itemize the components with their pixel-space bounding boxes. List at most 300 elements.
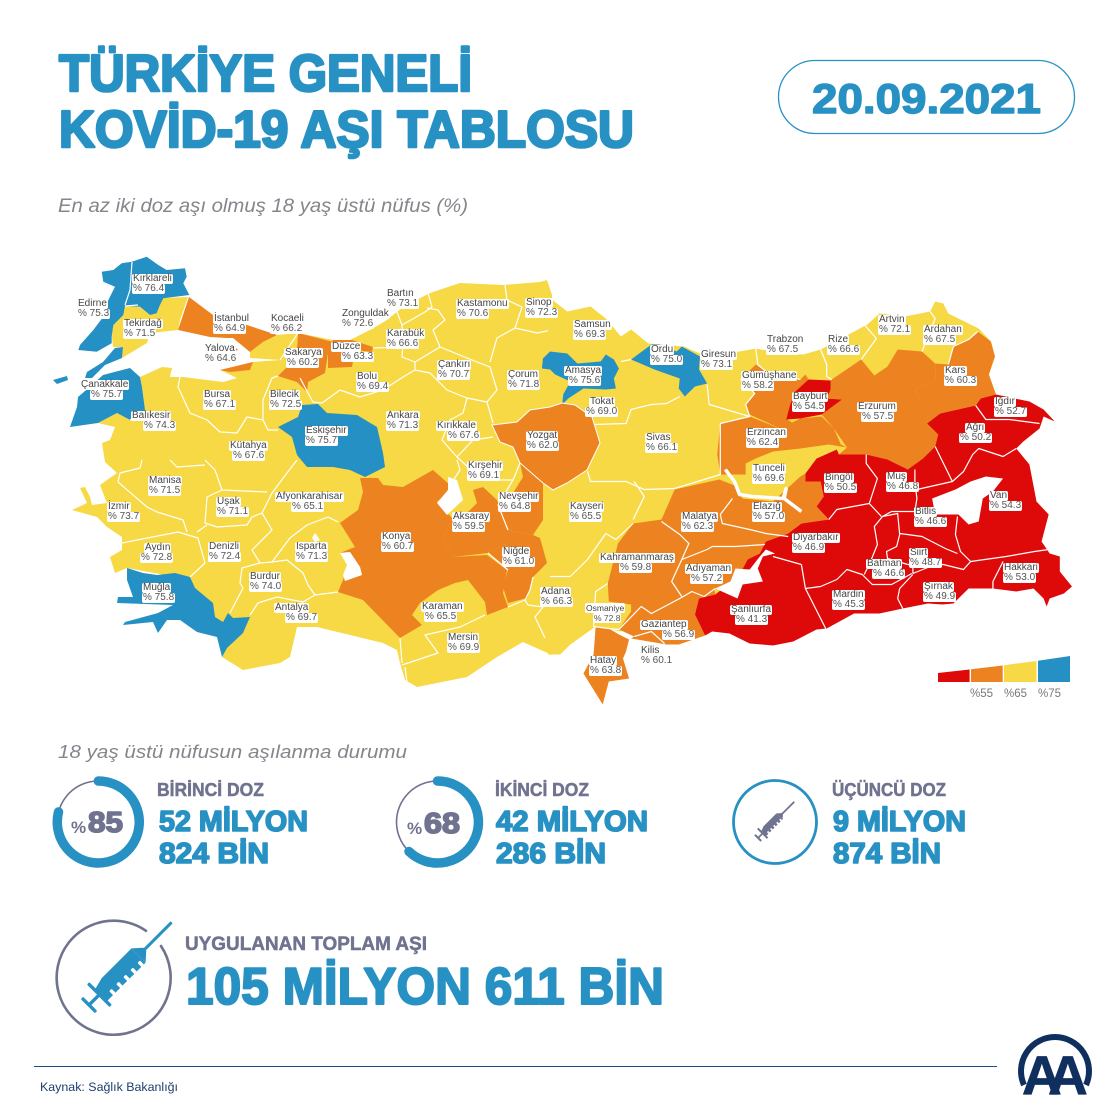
legend: %55 [970, 688, 993, 700]
source: Kaynak: Sağlık Bakanlığı [40, 1080, 178, 1094]
label: Niğde: Niğde [503, 546, 529, 557]
label: Bartın [387, 288, 419, 309]
label: Kırklareli [132, 273, 173, 294]
label: Van: Van [990, 490, 1007, 501]
label: Bolu: % 69.4 [357, 381, 388, 392]
Gökçeada [53, 376, 68, 384]
label: Yalova [205, 343, 236, 364]
label: Malatya [681, 512, 718, 532]
label: Tunceli: % 69.6 [753, 473, 784, 484]
label: Diyarbakır: Diyarbakır [793, 532, 839, 543]
label: Bingöl: % 50.5 [825, 482, 856, 493]
second dose text: 286 BİN [496, 838, 606, 870]
label: Sivas [645, 433, 678, 453]
label: Çankırı: % 70.7 [438, 369, 469, 380]
label: Tekirdağ: % 71.5 [124, 328, 155, 339]
label: Konya [381, 531, 414, 552]
label: Ağrı: Ağrı [966, 422, 984, 433]
label: Ardahan: Ardahan [924, 324, 962, 335]
label: Zonguldak [342, 308, 390, 329]
label: Tokat [585, 397, 618, 417]
label: Iğdır: % 52.7 [995, 406, 1026, 417]
label: Ankara [386, 410, 420, 431]
label: Gaziantep: Gaziantep [641, 619, 687, 630]
label: İzmir: İzmir [108, 501, 130, 512]
label: Tunceli [752, 464, 786, 484]
Beyşehir lake [340, 552, 362, 581]
label: Kayseri: Kayseri [570, 501, 603, 512]
label: Balıkesir: Balıkesir [132, 410, 170, 421]
label: Antalya: % 69.7 [286, 612, 317, 623]
Atatürk dam lake [715, 550, 775, 598]
label: İstanbul [213, 312, 249, 334]
label: Sinop: % 72.3 [526, 307, 557, 318]
label: Afyonkarahisar [275, 491, 344, 512]
Gümüşhane [741, 364, 808, 428]
label: İstanbul: İstanbul [214, 313, 249, 324]
label: Osmaniye: Osmaniye [586, 603, 624, 613]
label: Karaman: % 65.5 [425, 611, 456, 622]
label: Kahramanmaraş: % 59.8 [620, 562, 651, 573]
label: Iğdır [994, 397, 1027, 417]
label: Erzincan: % 62.4 [747, 437, 778, 448]
label: Diyarbakır: % 46.9 [793, 542, 824, 553]
label: Balıkesir: % 74.3 [144, 420, 175, 431]
label: Muş: % 46.8 [887, 481, 918, 492]
Niğde [488, 530, 547, 603]
label: Balıkesir [131, 410, 176, 431]
total vaccine text: UYGULANAN TOPLAM AŞI [185, 933, 427, 955]
third dose ring with syringe [734, 780, 816, 864]
label: Zonguldak: % 72.6 [342, 318, 373, 329]
first dose text: BİRİNCİ DOZ [157, 780, 264, 800]
label: Samsun [573, 320, 612, 340]
label: Muğla [142, 583, 175, 603]
label: Erzurum: % 57.5 [862, 411, 893, 422]
label: Kırıkkale: % 67.6 [448, 430, 479, 441]
label: Bartın: Bartın [387, 288, 414, 299]
Ordu [631, 344, 707, 396]
label: Şanlıurfa: Şanlıurfa [731, 604, 771, 615]
third dose text: 9 MİLYON [833, 806, 966, 838]
label: Siirt [909, 548, 942, 568]
label: Samsun: Samsun [574, 319, 611, 330]
date pill [778, 60, 1074, 134]
label: Gümüşhane [741, 371, 797, 391]
label: Hakkari: % 53.0 [1004, 572, 1035, 583]
label: Zonguldak: Zonguldak [342, 308, 389, 319]
third dose text: ÜÇÜNCÜ DOZ [832, 780, 946, 800]
label: Antalya: Antalya [275, 602, 308, 613]
first dose text: 824 BİN [159, 838, 269, 870]
orange south-east group: Malatya, Elazığ, Adıyaman, Kahramanmaraş, Gaziantep, Kilis [608, 474, 829, 644]
total vaccine text [185, 933, 664, 1016]
label: Kayseri: % 65.5 [570, 511, 601, 522]
label: Adıyaman: Adıyaman [686, 563, 731, 574]
Keban dam lake [725, 470, 801, 512]
second dose ring [396, 781, 478, 863]
label: Çankırı: Çankırı [438, 359, 470, 370]
label: Kırıkkale: Kırıkkale [437, 420, 476, 431]
label: Burdur [249, 571, 282, 592]
label: Şanlıurfa [730, 605, 772, 625]
map of Turkey [53, 256, 1072, 704]
label: Tunceli: Tunceli [753, 463, 785, 474]
Amasya [542, 352, 619, 404]
label: Uşak: % 71.1 [217, 506, 248, 517]
label: Ankara: Ankara [387, 410, 419, 421]
label: Van: % 54.3 [990, 500, 1021, 511]
label: Adıyaman: % 57.2 [691, 573, 722, 584]
label: İzmir [107, 500, 140, 522]
label: Isparta: Isparta [296, 541, 327, 552]
title line 1: TÜRKİYE GENELİ [59, 45, 472, 103]
label: Bayburt: % 54.5 [793, 401, 824, 412]
Tuz lake [437, 477, 463, 515]
label: Afyonkarahisar: Afyonkarahisar [276, 491, 343, 502]
label: Erzincan: Erzincan [747, 427, 786, 438]
label: Karaman [421, 602, 464, 622]
label: Kırıkkale [436, 420, 480, 441]
label: Elazığ: Elazığ [753, 501, 781, 512]
label: Ağrı [959, 423, 992, 443]
label: Van [989, 491, 1022, 511]
label: Bursa: % 67.1 [204, 399, 235, 410]
label: Gümüşhane: Gümüşhane [742, 370, 796, 381]
Erzincan [717, 416, 847, 474]
label: Manisa: % 71.5 [149, 485, 180, 496]
label: Kastamonu [456, 298, 509, 319]
label: Erzurum [857, 402, 897, 422]
map subtitle: En az iki doz aşı olmuş 18 yaş üstü nüfus (%) [58, 196, 468, 217]
label: Elazığ [752, 502, 785, 522]
stats subtitle: 18 yaş üstü nüfusun aşılanma durumu [58, 742, 407, 762]
label: Kahramanmaraş: Kahramanmaraş [600, 552, 674, 563]
label: Adana [540, 587, 573, 607]
label: Kocaeli: Kocaeli [271, 313, 304, 324]
label: Muğla: Muğla [143, 582, 170, 593]
label: Karabük [386, 328, 425, 349]
label: Yozgat [526, 430, 559, 451]
label: Eskişehir [305, 425, 348, 446]
label: Gaziantep [640, 620, 695, 640]
label: Düzce [331, 341, 374, 362]
eastern yellow base [548, 296, 996, 654]
label: Bayburt [792, 392, 828, 412]
label: Kütahya [229, 440, 268, 461]
label: Ordu [650, 345, 683, 365]
label: Mersin: Mersin [448, 632, 478, 643]
label: Kars: Kars [945, 365, 966, 376]
label: Çanakkale: Çanakkale [81, 379, 128, 390]
label: Kırşehir: Kırşehir [468, 460, 502, 471]
label: Edirne: Edirne [78, 298, 107, 309]
label: Kırklareli: % 76.4 [133, 283, 164, 294]
label: Yozgat: % 62.0 [527, 440, 558, 451]
icon: large syringe [76, 911, 183, 1018]
label: Çorum: % 71.8 [508, 379, 539, 390]
label: Bilecik: % 72.5 [270, 399, 301, 410]
label: Ordu: Ordu [651, 344, 673, 355]
label: Ankara: % 71.3 [387, 420, 418, 431]
label: Kilis: Kilis [641, 645, 659, 656]
label: Yalova: % 64.6 [205, 353, 236, 364]
label: Şırnak [923, 582, 956, 602]
label: İzmir: % 73.7 [108, 511, 139, 522]
label: Isparta [295, 541, 328, 562]
label: Giresun: % 73.1 [701, 359, 732, 370]
Çanakkale [70, 368, 145, 427]
label: Osmaniye [585, 603, 625, 623]
label: İstanbul: % 64.9 [214, 323, 245, 334]
icon: small syringe [752, 797, 799, 844]
label: Karaman: Karaman [422, 601, 463, 612]
label: Iğdır: Iğdır [995, 396, 1015, 407]
label: Niğde: % 61.0 [503, 556, 534, 567]
Eğirdir lake [312, 533, 320, 542]
label: Samsun: % 69.3 [574, 329, 605, 340]
label: Mardin [832, 590, 865, 610]
label: Artvin: Artvin [879, 314, 905, 325]
date pill: 20.09.2021 [812, 75, 1041, 122]
label: Kocaeli [270, 313, 304, 334]
label: Trabzon: % 67.5 [767, 344, 798, 355]
western yellow base [72, 280, 552, 687]
label: Ardahan: % 67.5 [924, 334, 955, 345]
legend: %75 [1038, 688, 1061, 700]
label: Ordu: % 75.0 [651, 354, 682, 365]
label: Bursa [203, 389, 236, 410]
label: Osmaniye: % 72.8 [594, 613, 620, 623]
label: Elazığ: % 57.0 [753, 511, 784, 522]
label: Adana: Adana [541, 586, 570, 597]
label: Muş: Muş [887, 471, 906, 482]
label: Karabük: % 66.6 [387, 338, 418, 349]
label: Erzincan [746, 428, 787, 448]
label: Kayseri [569, 502, 604, 522]
label: Kırklareli: Kırklareli [133, 273, 172, 284]
Thrace yellow: Tekirdağ [112, 297, 188, 358]
label: Aydın [140, 542, 173, 563]
first dose ring: 85 [88, 807, 123, 839]
first dose ring [57, 781, 139, 863]
label: Muğla: % 75.8 [143, 592, 174, 603]
label: Kırşehir [467, 460, 503, 481]
eastern provinces [542, 296, 1072, 704]
label: Uşak: Uşak [217, 496, 240, 507]
total vaccine text: 105 MİLYON 611 BİN [186, 958, 664, 1016]
Yalova [220, 362, 253, 372]
label: Edirne [78, 298, 110, 319]
legend: %65 [1004, 688, 1027, 700]
third dose text [832, 780, 966, 870]
label: Amasya [564, 366, 602, 386]
label: Nevşehir [498, 491, 539, 512]
label: Denizli: Denizli [209, 541, 239, 552]
label: Adana: % 66.3 [541, 596, 572, 607]
label: Artvin: % 72.1 [879, 324, 910, 335]
label: Eskişehir: % 75.7 [306, 435, 337, 446]
western province borders [118, 262, 552, 683]
label: Mersin: % 69.9 [448, 642, 479, 653]
label: Sakarya: Sakarya [285, 347, 322, 358]
label: Burdur: % 74.0 [250, 581, 281, 592]
label: Amasya: % 75.6 [569, 375, 600, 386]
label: Diyarbakır [792, 533, 840, 553]
label: Trabzon [766, 335, 804, 355]
label: Gümüşhane: % 58.2 [742, 380, 773, 391]
label: Rize: Rize [828, 334, 848, 345]
label: Manisa [148, 475, 182, 496]
label: Ağrı: % 50.2 [960, 432, 991, 443]
label: Yozgat: Yozgat [527, 430, 557, 441]
label: Düzce: % 63.3 [342, 351, 373, 362]
label: Tekirdağ [123, 318, 163, 339]
label: Trabzon: Trabzon [767, 334, 803, 345]
label: Hatay [589, 656, 622, 676]
third dose text: 874 BİN [833, 838, 941, 870]
label: Batman: % 46.6 [873, 568, 904, 579]
label: Edirne: % 75.3 [78, 308, 109, 319]
label: Konya: Konya [382, 531, 410, 542]
total vaccine icon [57, 911, 183, 1035]
label: Bingöl [824, 473, 857, 493]
label: Kahramanmaraş [599, 553, 675, 573]
Konya [338, 470, 508, 638]
Bayburt [786, 380, 842, 420]
label: Siirt: Siirt [910, 547, 927, 558]
label: Bilecik: Bilecik [270, 389, 299, 400]
label: Denizli [208, 541, 241, 562]
label: Sivas: Sivas [646, 432, 670, 443]
label: Bitlis [914, 507, 947, 527]
label: Sinop: Sinop [526, 297, 552, 308]
second dose text: İKİNCİ DOZ [495, 780, 589, 800]
Yozgat [492, 403, 600, 490]
title and date and section texts [58, 45, 1076, 217]
label: Niğde [502, 546, 535, 567]
label: Nevşehir: Nevşehir [499, 491, 538, 502]
eastern province borders [550, 312, 1049, 644]
label: Kars [944, 366, 977, 386]
Van lake [932, 476, 1003, 524]
label: Afyonkarahisar: % 65.1 [292, 501, 323, 512]
label: Şırnak: Şırnak [924, 581, 953, 592]
label: Mardin: Mardin [833, 589, 864, 600]
label: Rize: % 66.6 [828, 344, 859, 355]
label: Sakarya: % 60.2 [287, 357, 318, 368]
first dose text: 52 MİLYON [159, 806, 308, 838]
label: Kırşehir: % 69.1 [468, 470, 499, 481]
label: Giresun [700, 350, 737, 370]
label: Karabük: Karabük [387, 328, 424, 339]
label: Isparta: % 71.3 [296, 551, 327, 562]
western provinces [53, 257, 552, 687]
label: Giresun: Giresun [701, 349, 736, 360]
Eskişehir [278, 404, 385, 477]
label: Artvin [878, 315, 911, 335]
label: Bitlis: Bitlis [915, 506, 936, 517]
label: Çorum: Çorum [508, 369, 538, 380]
label: Çanakkale [81, 379, 129, 400]
label: Batman [866, 559, 905, 579]
Erzurum [822, 350, 940, 470]
first dose ring: % [71, 818, 86, 837]
label: Siirt: % 48.7 [910, 557, 941, 568]
label: Şanlıurfa: % 41.3 [736, 614, 767, 625]
label: Aksaray: % 59.5 [453, 521, 484, 532]
Aksaray [443, 487, 508, 557]
label: Kütahya: % 67.6 [233, 450, 264, 461]
label: Şırnak: % 49.9 [924, 591, 955, 602]
second dose ring: % [407, 819, 422, 838]
label: Konya: % 60.7 [382, 541, 413, 552]
İstanbul [178, 297, 277, 352]
label: Yalova: Yalova [205, 343, 235, 354]
label: Bolu [356, 371, 389, 392]
label: Bursa: Bursa [204, 389, 230, 400]
label: Bitlis: % 46.6 [915, 516, 946, 527]
label: Kilis: % 60.1 [641, 655, 672, 666]
label: Bolu: Bolu [357, 371, 377, 382]
label: Mardin: % 45.3 [833, 599, 864, 610]
label: Bartın: % 73.1 [387, 298, 418, 309]
label: Kastamonu: Kastamonu [457, 298, 508, 309]
label: Mersin [447, 633, 480, 653]
label: Malatya: Malatya [682, 511, 717, 522]
label: Bingöl: Bingöl [825, 472, 853, 483]
label: Kars: % 60.3 [945, 375, 976, 386]
label: Sinop [525, 297, 558, 318]
Düzce [328, 340, 373, 368]
label: Çorum [507, 369, 540, 390]
label: Aksaray: Aksaray [453, 511, 489, 522]
title line 2: KOVİD-19 AŞI TABLOSU [59, 101, 634, 159]
Gallipoli [85, 347, 123, 378]
label: Aydın: Aydın [145, 542, 170, 553]
label: Aksaray [452, 511, 490, 532]
label: Amasya: Amasya [565, 365, 601, 376]
label: Tokat: % 69.0 [586, 406, 617, 417]
label: Uşak [216, 496, 249, 517]
label: Antalya [274, 603, 318, 623]
label: Aydın: % 72.8 [141, 552, 172, 563]
label: Batman: Batman [867, 558, 901, 569]
label: Eskişehir: Eskişehir [306, 425, 347, 436]
label: Denizli: % 72.4 [209, 551, 240, 562]
Nevşehir [498, 463, 543, 535]
label: Sakarya [284, 347, 323, 368]
label: Burdur: Burdur [250, 571, 280, 582]
Kars [915, 332, 996, 414]
second dose text: 42 MİLYON [496, 806, 648, 838]
label: Rize [827, 335, 860, 355]
Sakarya [278, 333, 333, 392]
legend [938, 656, 1070, 700]
label: Bilecik [269, 389, 302, 410]
Muğla [117, 568, 250, 657]
label: Kütahya: Kütahya [230, 440, 267, 451]
label: Kocaeli: % 66.2 [271, 323, 302, 334]
label: Gaziantep: % 56.9 [663, 629, 694, 640]
label: Nevşehir: % 64.8 [499, 501, 530, 512]
label: Muş [886, 472, 919, 492]
label: Malatya: % 62.3 [682, 521, 713, 532]
second dose ring: 68 [424, 808, 460, 840]
label: Manisa: Manisa [149, 475, 181, 486]
label: Kilis [640, 646, 673, 666]
label: Çanakkale: % 75.7 [91, 389, 122, 400]
